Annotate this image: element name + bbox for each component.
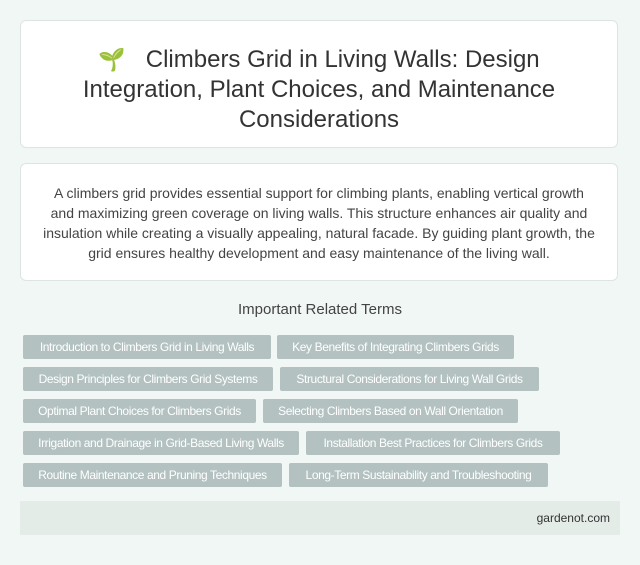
summary card xyxy=(20,163,618,281)
title card: Integration, Plant Choices, and Maintenance xyxy=(83,76,555,103)
tag: Routine Maintenance and Pruning Techniques xyxy=(38,468,267,482)
title card: 🌱 Climbers Grid in Living Walls: Design xyxy=(98,46,540,73)
tag: Selecting Climbers Based on Wall Orientation xyxy=(278,404,503,418)
tag xyxy=(289,463,548,487)
title card: Considerations xyxy=(239,106,399,133)
tag: Design Principles for Climbers Grid Systems xyxy=(39,372,257,386)
tag xyxy=(280,367,539,391)
tag xyxy=(23,399,256,423)
tag xyxy=(277,335,514,359)
title card xyxy=(20,20,618,148)
tag: Irrigation and Drainage in Grid-Based Living Walls xyxy=(38,436,284,450)
tag xyxy=(23,367,273,391)
footer: gardenot.com xyxy=(537,511,610,525)
tag xyxy=(23,335,271,359)
tag: Long-Term Sustainability and Troubleshooting xyxy=(306,468,531,482)
tag xyxy=(23,463,282,487)
tag: Introduction to Climbers Grid in Living Walls xyxy=(40,340,254,354)
summary card: A climbers grid provides essential support for climbing plants, enabling vertical growth and maximizing green coverage on living walls. This structure enhances air quality and insulation while creating a visually appealing, natural facade. By guiding plant growth, the grid ensures healthy development and easy maintenance of the living wall. xyxy=(43,185,595,261)
tag: Structural Considerations for Living Wall Grids xyxy=(296,372,523,386)
tag: Installation Best Practices for Climbers Grids xyxy=(323,436,542,450)
tag xyxy=(263,399,518,423)
tag: Optimal Plant Choices for Climbers Grids xyxy=(38,404,241,418)
footer xyxy=(20,501,620,535)
tag: Key Benefits of Integrating Climbers Grids xyxy=(292,340,499,354)
tag xyxy=(306,431,560,455)
heading: related terms: Important Related Terms xyxy=(238,301,402,318)
tag xyxy=(23,431,299,455)
